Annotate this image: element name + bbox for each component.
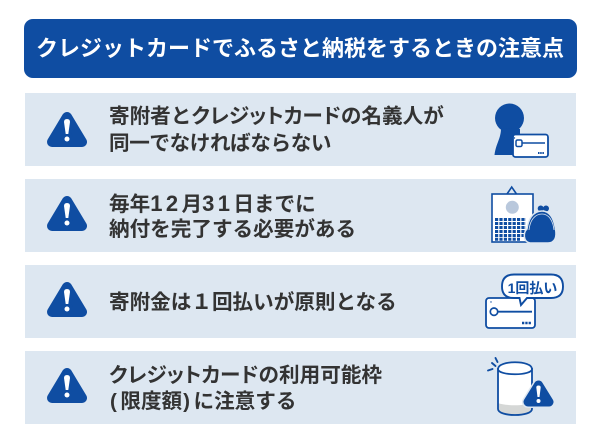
- icon: warning triangle: [47, 196, 87, 231]
- text: cardholder name: [109, 105, 444, 155]
- text: payment deadline: [109, 191, 356, 241]
- panel: single payment: [25, 265, 576, 338]
- icon: warning triangle: [47, 112, 87, 147]
- icon: warning triangle: [47, 368, 87, 403]
- title: [24, 19, 577, 78]
- icon: card with speech bubble: [485, 274, 564, 329]
- icon: limit cylinder with warning: [487, 357, 554, 416]
- text: payment deadline: 毎年12月31日までに: [109, 191, 316, 216]
- icon: warning triangle: [47, 282, 87, 317]
- panel: payment deadline: [25, 179, 576, 252]
- panel: credit limit: [25, 351, 576, 424]
- text: single payment: 寄附金は１回払いが原則となる: [109, 291, 397, 314]
- text: credit limit: [109, 364, 382, 413]
- icon: calendar and purse: [491, 186, 556, 243]
- icon: person with card: [494, 104, 549, 158]
- panel: cardholder name: [25, 93, 576, 166]
- text: payment deadline: 納付を完了する必要がある: [109, 218, 356, 241]
- text: credit limit: (限度額)に注意する: [110, 390, 296, 413]
- text: cardholder name: 寄附者とクレジットカードの名義人が: [109, 105, 444, 128]
- text: credit limit: クレジットカードの利用可能枠: [109, 364, 382, 387]
- text: cardholder name: 同一でなければならない: [109, 132, 331, 155]
- title: クレジットカードでふるさと納税をするときの注意点: [36, 36, 564, 61]
- speech bubble: 1回払い: [508, 280, 557, 296]
